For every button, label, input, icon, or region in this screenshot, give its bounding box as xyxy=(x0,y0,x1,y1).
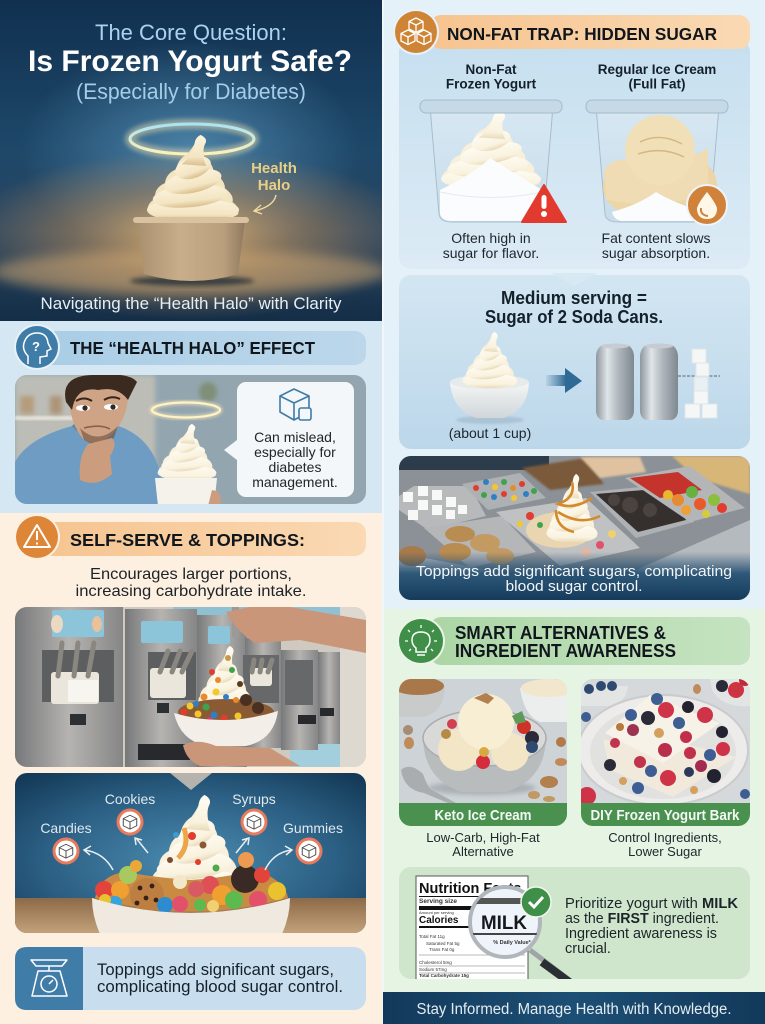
callout: can mislead: management. xyxy=(252,474,338,490)
card: keto ice cream: Low-Carb, High-Fat xyxy=(426,830,540,845)
caption: toppings xyxy=(416,564,732,595)
tray: candy xyxy=(462,473,546,510)
column: non-fat frozen yogurt: sugar for flavor. xyxy=(443,245,539,261)
panel: health halo effect xyxy=(0,321,382,513)
tray: brown granola xyxy=(522,458,604,490)
text: prioritize milk: crucial. xyxy=(565,941,611,957)
heading: hero title xyxy=(28,20,352,104)
card: keto ice cream xyxy=(399,679,567,856)
label: candies xyxy=(40,820,92,863)
column: non-fat frozen yogurt: Frozen Yogurt xyxy=(446,76,537,92)
callout: can mislead: especially for xyxy=(254,444,336,460)
card: keto ice cream: Keto Ice Cream xyxy=(434,807,532,824)
column: regular ice cream: (Full Fat) xyxy=(628,76,686,92)
heading: self-serve xyxy=(40,522,366,556)
heading: non-fat trap xyxy=(430,15,750,49)
text: prioritize milk: Ingredient awareness is xyxy=(565,926,717,942)
icon: check xyxy=(521,887,551,917)
label: health halo xyxy=(251,160,297,214)
callout: toppings add sugars: Toppings add significant sugars, xyxy=(97,960,334,979)
tray: chocolate cookies xyxy=(590,484,694,538)
illustration: sugar cube stack xyxy=(678,349,720,418)
column: non-fat frozen yogurt: Often high in xyxy=(451,230,531,246)
text: larger portions: increasing carbohydrate intake. xyxy=(76,583,306,600)
magnifier: MILK xyxy=(481,913,527,934)
heading: health halo effect xyxy=(40,331,366,365)
column: regular ice cream: Fat content slows xyxy=(602,230,710,246)
tray: center with sundae xyxy=(496,474,640,566)
column: regular ice cream: Regular Ice Cream xyxy=(598,62,716,77)
photo: man considering yogurt xyxy=(15,374,366,506)
plate xyxy=(578,695,748,805)
panel: toppings breakdown xyxy=(15,773,366,934)
magnifier: % Daily Value* xyxy=(493,940,532,946)
label: candies: Candies xyxy=(40,820,92,836)
caption: toppings: Toppings add significant sugars, complicating xyxy=(416,564,732,580)
magnifier xyxy=(470,887,572,984)
hand with spoon xyxy=(226,607,366,653)
heading: non-fat trap: NON-FAT TRAP: HIDDEN SUGAR xyxy=(447,24,717,44)
nutrition facts panel: Total Fat 11g xyxy=(419,934,445,939)
panel: medium serving comparison xyxy=(399,273,750,449)
callout: ingredient awareness xyxy=(399,867,750,984)
nutrition facts panel: Cholesterol 5mg xyxy=(419,960,452,965)
icon: box xyxy=(280,389,311,420)
nutrition facts panel: Saturated Fat 5g xyxy=(426,941,460,946)
icon: head with question: ? xyxy=(32,339,40,354)
icon: head with question xyxy=(14,324,60,370)
heading: health halo effect: THE “HEALTH HALO” EFFECT xyxy=(70,338,315,358)
heading: self-serve: SELF-SERVE & TOPPINGS: xyxy=(70,530,305,550)
icon: glowing halo xyxy=(130,124,254,154)
illustration: frozen yogurt cup xyxy=(130,135,254,286)
icon: red warning xyxy=(522,185,566,222)
card: diy frozen yogurt bark: Control Ingredients, xyxy=(608,830,722,845)
callout: toppings add sugars xyxy=(15,947,366,1010)
hero subtitle: Navigating the “Health Halo” with Clarity xyxy=(40,295,342,313)
notch pointer xyxy=(551,273,597,286)
spoon xyxy=(401,767,456,803)
footer banner xyxy=(383,992,765,1024)
nutrition facts panel xyxy=(416,876,528,981)
arrows: toppings to labels xyxy=(84,838,292,870)
ice cream bowl xyxy=(424,744,546,792)
icon: sugar cubes xyxy=(393,9,439,55)
illustration: yogurt bowl xyxy=(449,332,531,441)
heading: medium serving: Sugar of 2 Soda Cans. xyxy=(485,307,663,327)
heading: hero title: (Especially for Diabetes) xyxy=(76,79,306,104)
icon: fat drop xyxy=(687,185,727,225)
bark pieces xyxy=(603,740,736,797)
label: cookies: Cookies xyxy=(105,791,155,807)
label: health halo: Halo xyxy=(258,177,290,194)
label: gummies xyxy=(283,820,343,863)
callout: toppings add sugars: complicating blood sugar control. xyxy=(97,977,343,996)
tray: marshmallows xyxy=(399,486,486,530)
column: non-fat frozen yogurt xyxy=(420,62,566,261)
panel: self-serve and toppings xyxy=(0,513,382,1024)
label: syrups xyxy=(232,791,276,834)
tray: sprinkles xyxy=(580,457,646,478)
column: regular ice cream xyxy=(586,62,728,261)
photo: toppings bar xyxy=(398,456,750,600)
tray: cookies xyxy=(398,516,536,568)
sundae with candies xyxy=(92,795,290,934)
card: diy frozen yogurt bark: Lower Sugar xyxy=(628,844,703,859)
yogurt bowl with toppings xyxy=(174,646,300,766)
bowl of blueberries xyxy=(581,681,628,706)
illustration: yogurt bowl: (about 1 cup) xyxy=(449,425,531,441)
heading: hero title: The Core Question: xyxy=(95,20,287,45)
nutrition facts panel: Total Carbohydrate 15g xyxy=(419,973,469,978)
icon: warning xyxy=(14,514,60,560)
label: health halo: Health xyxy=(251,160,297,177)
nutrition facts panel: Amount per serving xyxy=(419,910,454,915)
heading: smart alternatives: SMART ALTERNATIVES & xyxy=(455,623,666,643)
footer banner: Stay Informed. Manage Health with Knowledge. xyxy=(416,1001,732,1018)
text: prioritize milk: Prioritize yogurt with MILK xyxy=(565,896,739,912)
heading: smart alternatives xyxy=(430,617,750,665)
tray: gummies xyxy=(625,466,745,522)
column: regular ice cream: sugar absorption. xyxy=(602,245,710,261)
column: non-fat frozen yogurt: Non-Fat xyxy=(466,62,517,77)
arrow: to cup xyxy=(254,195,276,214)
illustration: clear cup with ice cream xyxy=(586,100,728,225)
text: larger portions: Encourages larger portions, xyxy=(90,566,292,583)
heading: smart alternatives: INGREDIENT AWARENESS xyxy=(455,641,676,661)
nutrition label with magnifier xyxy=(416,876,572,984)
callout: can mislead xyxy=(224,382,354,497)
icon: kitchen scale xyxy=(15,947,83,1010)
caption: toppings: blood sugar control. xyxy=(506,579,642,595)
tray: cereal xyxy=(672,456,750,494)
label: gummies: Gummies xyxy=(283,820,343,836)
label: cookies xyxy=(105,791,155,834)
illustration: soda cans xyxy=(596,344,678,420)
arrow: equals xyxy=(546,368,582,393)
callout: can mislead: Can mislead, xyxy=(254,429,336,445)
bowl of cream xyxy=(520,679,567,722)
nutrition facts panel: Trans Fat 0g xyxy=(429,947,455,952)
panel: smart alternatives xyxy=(392,617,751,984)
bowl of berries xyxy=(710,679,750,706)
icon: small halo xyxy=(152,402,220,418)
text: prioritize milk: as the FIRST ingredient. xyxy=(565,911,719,927)
card: keto ice cream: Alternative xyxy=(452,844,514,859)
text: larger portions xyxy=(76,566,306,600)
callout: can mislead: diabetes xyxy=(269,459,321,475)
notch pointer xyxy=(170,773,212,790)
bowl of nuts xyxy=(399,679,445,717)
nutrition facts panel: Nutrition Facts xyxy=(419,881,521,897)
card: diy frozen yogurt bark xyxy=(578,674,751,859)
text: prioritize milk xyxy=(565,896,739,957)
card: diy frozen yogurt bark: DIY Frozen Yogurt Bark xyxy=(590,807,740,824)
nutrition facts panel: Serving size xyxy=(419,898,457,905)
nutrition facts panel: Sodium 57mg xyxy=(419,967,447,972)
panel: hero xyxy=(0,0,415,321)
photo: self-serve machines xyxy=(15,607,366,767)
heading: medium serving xyxy=(485,288,663,327)
nutrition facts panel: Calories xyxy=(419,915,459,926)
label: syrups: Syrups xyxy=(232,791,276,807)
heading: medium serving: Medium serving = xyxy=(501,288,647,308)
heading: hero title: Is Frozen Yogurt Safe? xyxy=(28,45,352,78)
panel: non-fat trap xyxy=(393,9,750,269)
illustration: clear cup with yogurt and sugar xyxy=(420,100,566,222)
icon: light bulb xyxy=(397,617,445,665)
